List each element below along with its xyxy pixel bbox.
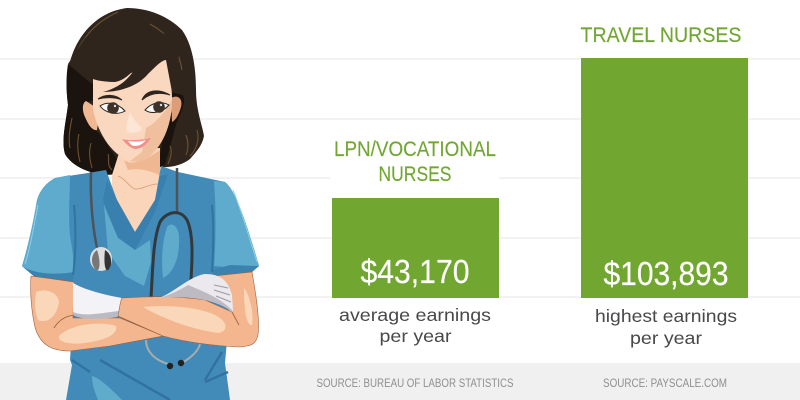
caption: highest earnings bbox=[595, 306, 737, 326]
left glove bbox=[73, 283, 122, 319]
heading: NURSES bbox=[378, 162, 452, 186]
illustration: nurse bbox=[22, 8, 259, 400]
source: SOURCE: BUREAU OF LABOR STATISTICS bbox=[316, 378, 514, 390]
scrub top bbox=[22, 166, 259, 400]
mouth bbox=[122, 138, 151, 149]
caption: per year bbox=[380, 326, 452, 346]
caption: average earnings bbox=[339, 305, 491, 325]
neck bbox=[112, 148, 165, 240]
bangs bbox=[68, 22, 182, 92]
left arm bbox=[31, 276, 163, 351]
hair bbox=[63, 8, 204, 175]
nose bbox=[126, 112, 142, 133]
right arm bbox=[118, 272, 259, 347]
value: $43,170 bbox=[360, 253, 470, 290]
brows bbox=[98, 95, 122, 100]
bar bbox=[332, 198, 499, 298]
footer band bbox=[0, 363, 800, 400]
chest piece bbox=[90, 247, 112, 271]
right glove bbox=[159, 274, 233, 312]
face bbox=[93, 58, 172, 161]
stethoscope bbox=[91, 168, 200, 364]
panel: travel nurses bbox=[580, 23, 748, 390]
value: $103,893 bbox=[604, 255, 728, 292]
source: SOURCE: PAYSCALE.COM bbox=[603, 378, 727, 390]
heading: LPN/VOCATIONAL bbox=[334, 137, 496, 161]
ears bbox=[83, 101, 100, 130]
bar bbox=[581, 58, 748, 298]
heading: TRAVEL NURSES bbox=[580, 23, 742, 47]
eyes bbox=[100, 103, 125, 113]
panel: LPN/vocational nurses bbox=[316, 137, 514, 390]
caption: per year bbox=[630, 328, 702, 348]
